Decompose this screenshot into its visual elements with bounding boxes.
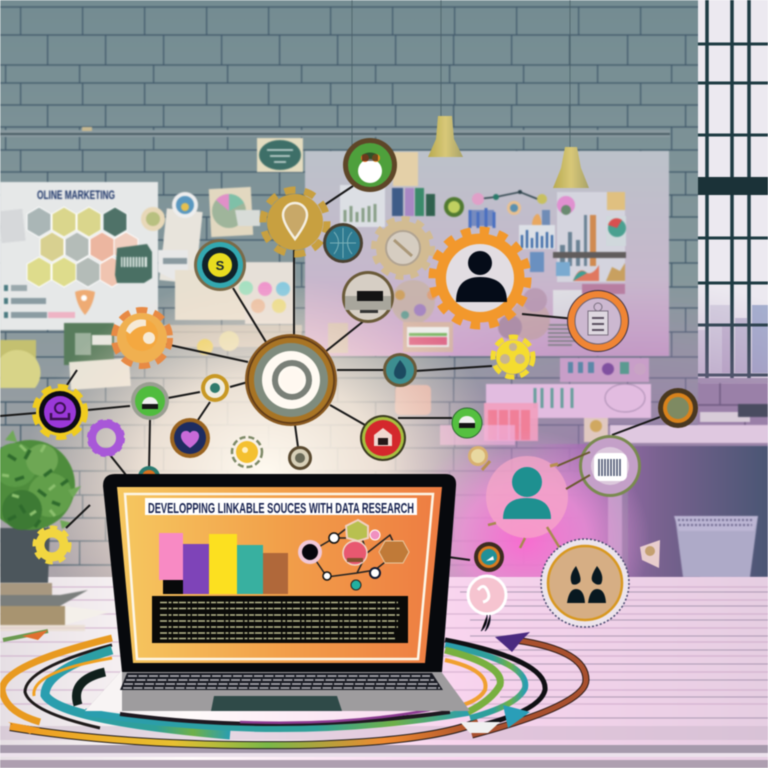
node: barcode — [579, 435, 641, 497]
laptop base deck — [85, 670, 470, 711]
node: green small right — [452, 408, 482, 438]
laptop — [85, 474, 470, 711]
network diagram — [298, 520, 409, 590]
poster title: OLINE MARKETING — [37, 188, 115, 202]
node: purple heart — [170, 418, 210, 458]
window with city view — [698, 0, 768, 383]
figures — [567, 566, 606, 603]
warm light glow — [25, 275, 505, 675]
chart card: bars top — [340, 152, 435, 227]
bar chart — [159, 533, 288, 594]
stacked books — [0, 583, 110, 631]
chart panels right — [557, 192, 626, 282]
purple light wash — [320, 280, 768, 760]
node: yellow dashed — [232, 437, 262, 467]
stack of lines — [548, 325, 578, 345]
desk surface — [0, 577, 768, 768]
lamp left — [428, 116, 463, 157]
line graph — [470, 190, 550, 230]
note card with chalk bubble — [257, 138, 303, 172]
dark lower wall — [530, 444, 768, 577]
waste bin — [674, 516, 758, 577]
node: central hub — [245, 334, 337, 426]
brown return arc — [472, 640, 586, 735]
node: red alert — [360, 415, 406, 461]
touchpad — [211, 696, 342, 711]
node: teal person on pink circle — [482, 452, 590, 550]
blue bars panel — [470, 208, 555, 272]
screen heading: DEVELOPPING LINKABLE SOUCES WITH DATA RESEARCH — [148, 500, 414, 517]
node: orange gear left — [114, 310, 170, 366]
wall shelf rail — [0, 127, 670, 137]
node: teal and yellow target — [194, 239, 246, 291]
node: green avatar — [343, 138, 397, 192]
node: small gray bottom — [288, 446, 312, 470]
rainbow circular arrows on desk — [2, 630, 586, 745]
node: green helmet — [131, 382, 169, 420]
lamp right — [553, 147, 589, 188]
pink light glow — [400, 430, 650, 650]
foliage — [0, 430, 81, 530]
collage of notes left of hub — [0, 138, 303, 390]
network connector lines — [0, 186, 660, 560]
side table — [608, 404, 768, 578]
node: yellow gear lower left — [35, 528, 69, 562]
node: orange gear with person — [433, 231, 527, 325]
teal arrowhead — [503, 705, 530, 728]
node: pink swirl — [468, 576, 506, 631]
node: orange ring with document — [567, 290, 629, 352]
small icon — [444, 197, 464, 217]
node: yellow gear purple badge — [35, 387, 85, 437]
left rainbow rings — [2, 638, 112, 722]
node: dark orange upper right — [658, 388, 698, 428]
hanging lamps — [352, 0, 589, 188]
side note — [0, 209, 26, 243]
screen text block — [152, 596, 408, 643]
right rainbow rings — [445, 640, 545, 728]
keyboard — [120, 673, 443, 690]
green/pink frame chart — [403, 322, 453, 352]
node: purple gear — [89, 421, 123, 455]
hexagon grid — [27, 207, 138, 287]
city skyline — [698, 305, 768, 373]
dark rule and area charts — [553, 252, 626, 318]
colorful cluster — [391, 280, 550, 340]
person icon — [456, 251, 507, 302]
screen bezel — [103, 474, 456, 672]
node: teal drop — [383, 353, 417, 387]
purple arrowhead — [495, 632, 530, 652]
screen — [117, 487, 442, 663]
node: partial behind laptop — [138, 466, 160, 488]
bottom sweep — [85, 712, 470, 728]
left poster: online marketing — [0, 182, 158, 330]
pin marker — [75, 290, 95, 315]
outer arrow — [10, 722, 478, 745]
node: small tan right — [468, 446, 488, 466]
legend rows — [4, 285, 75, 318]
node: gold gear with drop — [263, 190, 327, 254]
right poster with charts — [305, 151, 669, 356]
node: teal small above desk — [474, 542, 504, 572]
room furniture behind desk — [530, 383, 768, 578]
node: laptop icon — [342, 271, 394, 323]
node: tan footprints badge — [541, 539, 629, 627]
node: tag — [640, 540, 660, 568]
node: blue globe — [323, 223, 363, 263]
green badge — [115, 244, 152, 283]
pink lower collage — [395, 358, 651, 445]
node: yellow gear — [493, 337, 533, 377]
potted plant — [0, 430, 81, 583]
node: faded beige gear — [374, 219, 432, 277]
background wall — [0, 0, 700, 600]
node: teal and yellow target: S — [216, 258, 225, 273]
screen heading — [145, 498, 417, 517]
node: small gold emblem — [201, 374, 229, 402]
